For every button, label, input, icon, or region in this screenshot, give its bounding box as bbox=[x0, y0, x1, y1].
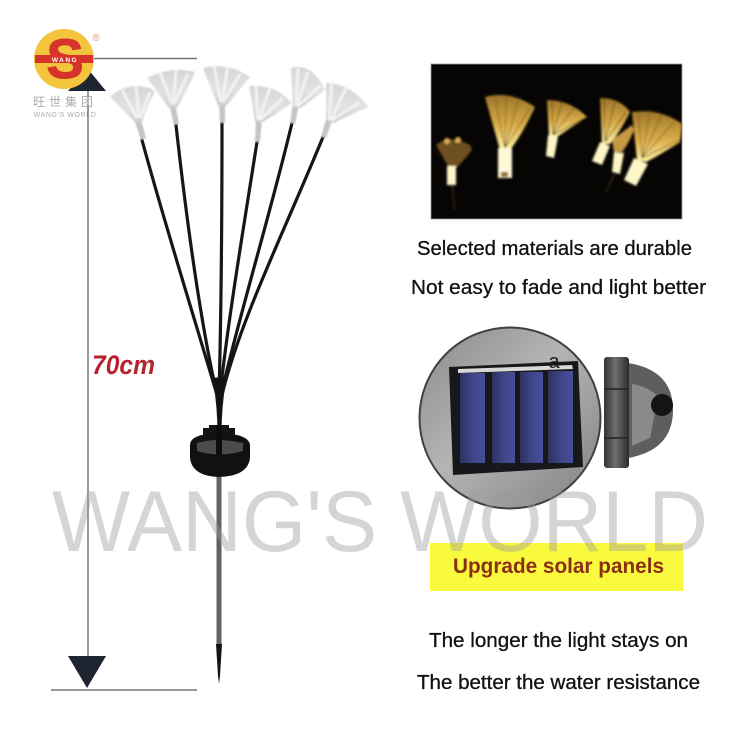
lit tuft 6 bbox=[624, 110, 682, 186]
stray letter: a bbox=[548, 351, 560, 373]
stems bbox=[142, 123, 323, 435]
highlight banner: upgrade solar panels: Upgrade solar panels bbox=[453, 555, 664, 578]
caption: durable materials: Not easy to fade and light better bbox=[411, 277, 706, 299]
watermark: WANG'S WORLD bbox=[52, 474, 708, 570]
photo: lights glowing at night bbox=[431, 64, 682, 219]
logo: Wang's World: ® bbox=[92, 33, 100, 44]
product detail: solar panel bbox=[420, 328, 673, 508]
hinge mount bbox=[604, 357, 673, 468]
round housing bbox=[420, 328, 600, 508]
height label: 70cm bbox=[92, 350, 155, 380]
logo: Wang's World bbox=[33, 27, 100, 119]
caption: durable materials bbox=[411, 238, 706, 299]
caption: light duration and water resistance bbox=[417, 630, 700, 694]
product: garden light with six stems bbox=[110, 66, 368, 684]
solar base bbox=[190, 425, 250, 477]
dimension marker: 70cm height bbox=[51, 58, 197, 690]
fibre tufts bbox=[110, 66, 368, 142]
caption: light duration and water resistance: The longer the light stays on bbox=[429, 630, 688, 652]
logo: Wang's World: S bbox=[46, 27, 84, 90]
stake bbox=[216, 474, 222, 684]
highlight banner: upgrade solar panels bbox=[430, 543, 683, 591]
lit tuft 5 bbox=[606, 125, 634, 192]
logo: Wang's World: WANG bbox=[52, 57, 78, 64]
lit tuft 4 bbox=[592, 98, 630, 165]
panel cells bbox=[449, 361, 583, 475]
logo: Wang's World: WANG'S WORLD bbox=[34, 112, 96, 119]
lit tuft 3 bbox=[546, 100, 587, 158]
logo: Wang's World: 旺世集团 bbox=[33, 94, 97, 109]
lit tuft 2 bbox=[485, 95, 535, 178]
caption: light duration and water resistance: The better the water resistance bbox=[417, 672, 700, 694]
caption: durable materials: Selected materials are durable bbox=[417, 238, 692, 260]
lit tuft 1 bbox=[436, 137, 472, 210]
